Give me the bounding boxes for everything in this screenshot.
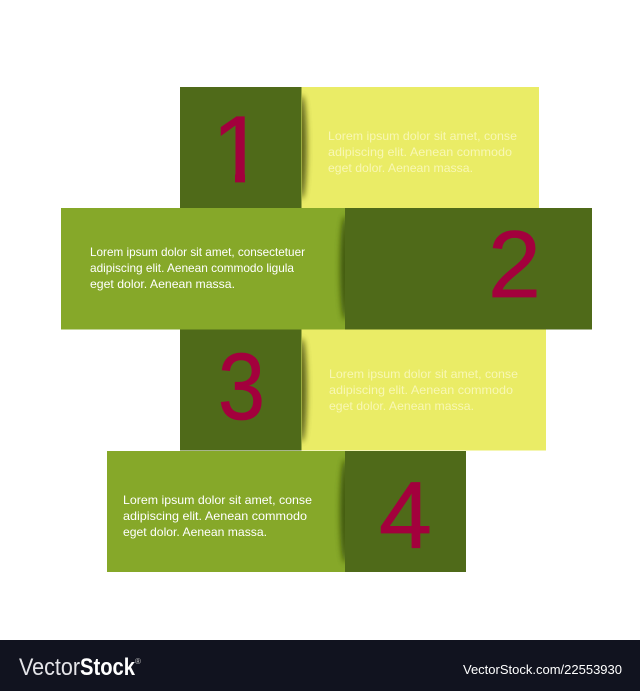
panel: step 4	[107, 451, 466, 572]
step 1 text	[328, 129, 517, 175]
panel: step 2	[61, 208, 592, 330]
step 4 text: adipiscing elit. Aenean commodo	[123, 509, 307, 523]
step 1 number block	[180, 87, 302, 208]
panel: step 3	[180, 330, 546, 450]
step 4 text: eget dolor. Aenean massa.	[123, 525, 267, 539]
footer logo: ®	[135, 657, 141, 666]
step 3 number: 3	[218, 334, 265, 440]
footer bar	[0, 640, 640, 691]
step 4 number: 4	[379, 463, 432, 569]
step 1 text: adipiscing elit. Aenean commodo	[328, 145, 512, 159]
panel: step 1	[180, 87, 539, 208]
step 2 text	[90, 245, 305, 291]
step 3 text	[329, 367, 518, 413]
step 4 text: Lorem ipsum dolor sit amet, conse	[123, 493, 312, 507]
step 2 text: eget dolor. Aenean massa.	[90, 277, 235, 291]
step 1 text: Lorem ipsum dolor sit amet, conse	[328, 129, 517, 143]
step 3 text: Lorem ipsum dolor sit amet, conse	[329, 367, 518, 381]
step 4 text	[123, 493, 312, 539]
step 3 text: eget dolor. Aenean massa.	[329, 399, 474, 413]
step 1 number: 1	[212, 97, 265, 203]
step 4 text background	[107, 451, 346, 572]
step 2 number block	[345, 208, 592, 330]
step 3 text background	[301, 330, 546, 450]
footer logo: Stock	[80, 654, 136, 681]
step 1 text background	[301, 87, 539, 208]
step 2 text: Lorem ipsum dolor sit amet, consectetuer	[90, 245, 305, 259]
step 3 text: adipiscing elit. Aenean commodo	[329, 383, 513, 397]
step 1 text: eget dolor. Aenean massa.	[328, 161, 473, 175]
step 3 fold shadow	[297, 338, 307, 442]
step 1 fold shadow	[297, 95, 307, 199]
step 2 text background	[61, 208, 346, 330]
step 2 fold shadow	[336, 214, 345, 322]
step 2 number: 2	[488, 212, 541, 318]
step 4 number block	[345, 451, 466, 572]
footer url: VectorStock.com/22553930	[463, 662, 622, 677]
step 4 fold shadow	[336, 458, 345, 564]
footer logo: Vector	[19, 654, 80, 681]
step 2 text: adipiscing elit. Aenean commodo ligula	[90, 261, 294, 275]
step 3 number block	[180, 330, 302, 450]
footer logo	[19, 654, 141, 681]
